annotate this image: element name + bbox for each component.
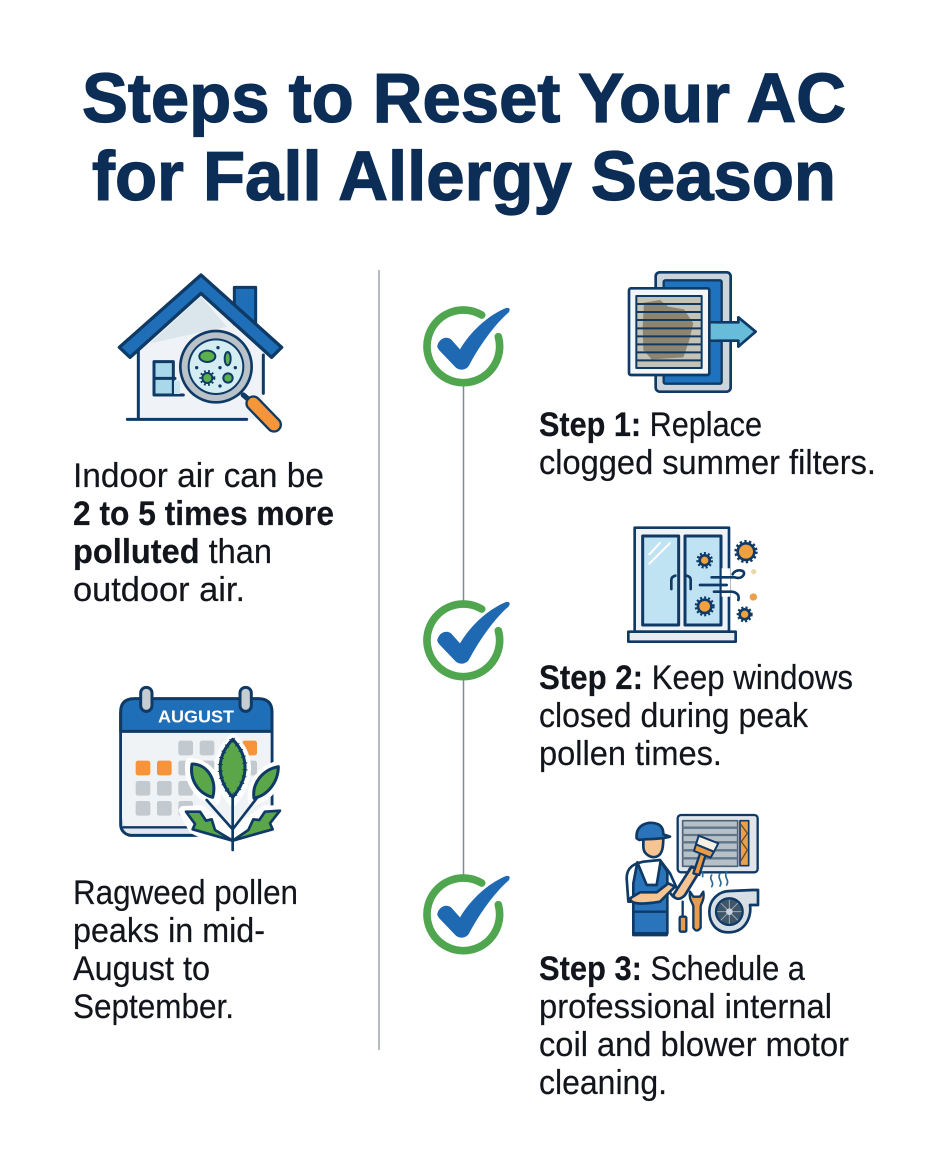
icon: house with magnifying glass: [119, 275, 282, 425]
tools: [680, 892, 704, 932]
title: [82, 59, 846, 215]
check mark 2: [427, 602, 510, 677]
text: step 3: Step 3: Schedule a: [539, 950, 805, 988]
icon: August calendar with ragweed: AUGUST: [158, 706, 234, 726]
blower motor: [709, 890, 758, 932]
icon: technician cleaning AC coil and blower: [627, 815, 758, 935]
check mark 1: [427, 308, 510, 383]
text: indoor air fact: polluted than: [73, 533, 272, 571]
text: step 1: [539, 406, 876, 482]
check mark 3: [427, 876, 510, 951]
icon: closed window with pollen: [628, 528, 757, 642]
text: step 3: coil and blower motor: [539, 1026, 849, 1064]
AC coil unit: [678, 815, 758, 887]
text: indoor air fact: 2 to 5 times more: [73, 495, 334, 533]
text: step 1: clogged summer filters.: [539, 444, 876, 482]
title: Steps to Reset Your AC: [82, 59, 846, 137]
icon: August calendar with ragweed: [121, 687, 282, 850]
text: step 3: cleaning.: [539, 1064, 667, 1102]
text: step 3: professional internal: [539, 988, 832, 1026]
text: step 1: Step 1: Replace: [539, 406, 762, 444]
text: ragweed fact: September.: [73, 988, 234, 1026]
text: step 2: [539, 659, 853, 773]
title: for Fall Allergy Season: [92, 137, 836, 215]
timeline with check marks: [427, 308, 510, 951]
text: indoor air fact: outdoor air.: [73, 571, 245, 609]
text: ragweed fact: Ragweed pollen: [73, 874, 298, 912]
text: step 3: [539, 950, 849, 1102]
text: indoor air fact: [73, 457, 334, 609]
ragweed plant: [183, 738, 282, 850]
technician: [627, 823, 699, 935]
text: step 2: pollen times.: [539, 735, 722, 773]
panel: steps column: [539, 272, 876, 1102]
text: ragweed fact: August to: [73, 950, 210, 988]
text: ragweed fact: [73, 874, 298, 1026]
panel: facts column: [73, 275, 334, 1026]
text: step 2: Step 2: Keep windows: [539, 659, 853, 697]
text: ragweed fact: peaks in mid-: [73, 912, 265, 950]
text: indoor air fact: Indoor air can be: [73, 457, 324, 495]
text: step 2: closed during peak: [539, 697, 809, 735]
icon: clogged filter replacement: [629, 272, 756, 392]
paint brush: [693, 836, 718, 875]
